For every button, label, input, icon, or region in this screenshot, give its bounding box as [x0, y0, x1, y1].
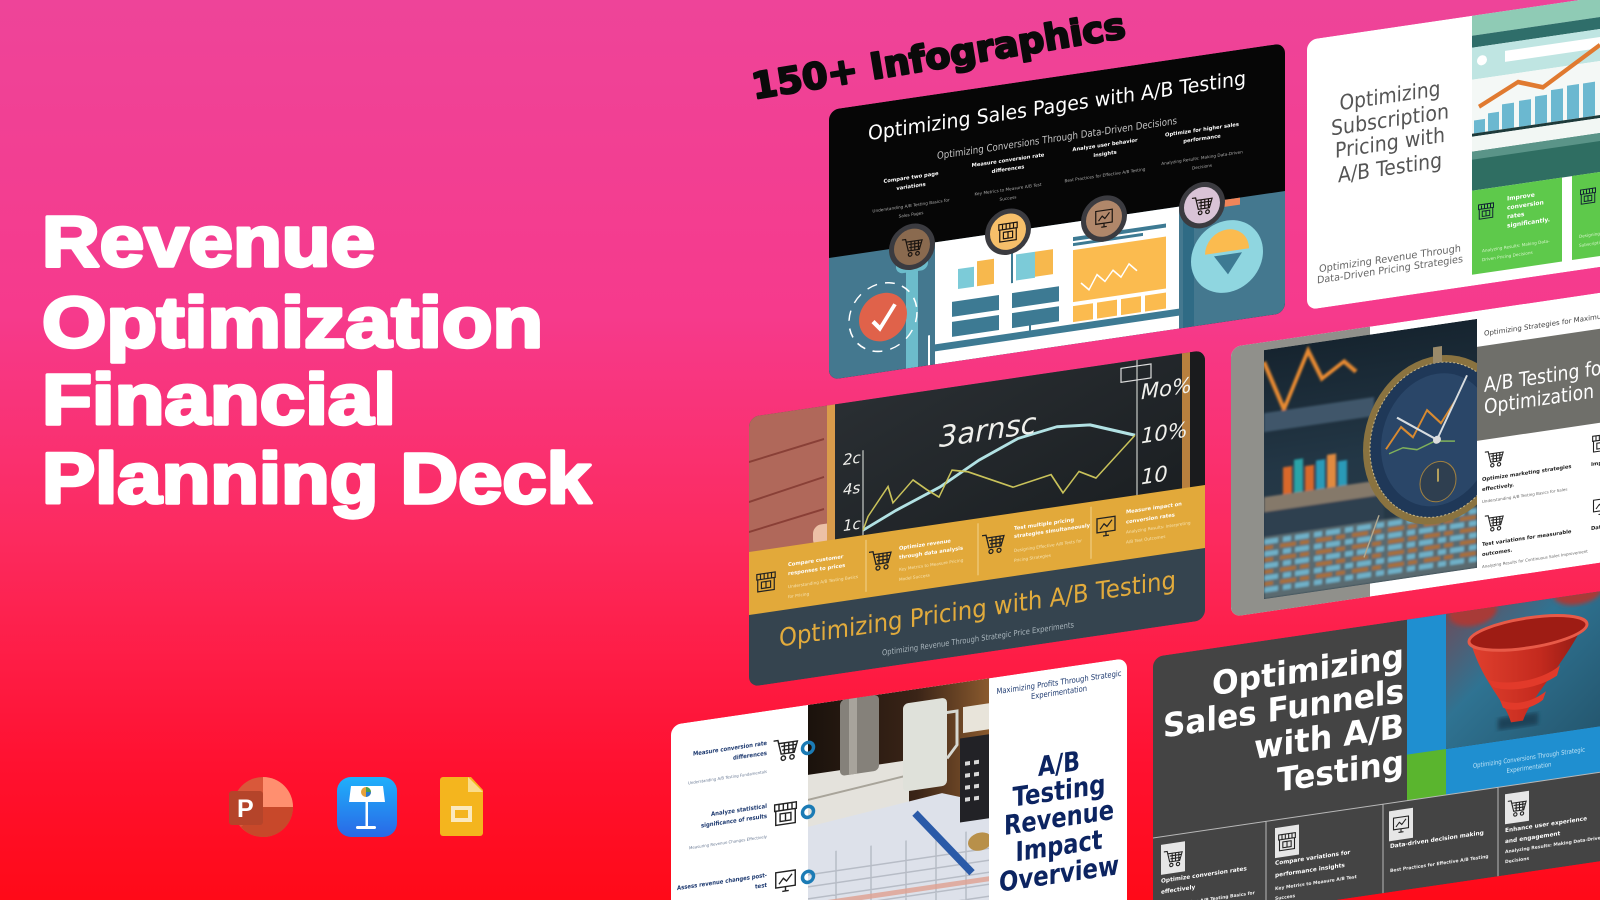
- panel: yellow feature band: Key Metrics to Measure Pricing: [899, 557, 964, 572]
- panel: yellow feature band: Measure impact on: [1126, 501, 1182, 516]
- subtitle: funnels: Experimentation: [1507, 760, 1552, 775]
- text: four column descriptions: Analyzing Results: Making Data-Driven: [1161, 149, 1243, 166]
- text: funnel features: performance insights: [1275, 863, 1345, 879]
- panel: green callout one: significantly.: [1507, 216, 1550, 230]
- software icons row: [229, 777, 483, 837]
- text: feature list: [1482, 431, 1600, 569]
- text: right panel subtitle: Maximizing Profits Through Strategic: [996, 669, 1121, 696]
- icon: Google Slides: [440, 777, 483, 836]
- text: four column labels: Measure conversion rate: [972, 152, 1045, 169]
- heading: subscription title: [1332, 83, 1448, 182]
- image: chalkboard photo: 10%: [1141, 417, 1188, 448]
- image: chalkboard photo: 10: [1141, 461, 1168, 489]
- image: chalkboard photo: 1c: [843, 515, 861, 535]
- heading: subscription title: Pricing with: [1335, 122, 1445, 163]
- text: funnel features: and engagement: [1505, 831, 1560, 845]
- text: four column descriptions: Sales Pages: [899, 210, 923, 219]
- text: metrics list: Measuring Revenue Changes Effectively: [689, 834, 768, 850]
- image: chalkboard photo: Mo%: [1141, 372, 1192, 404]
- heading: Optimizing Sales Funnels with A/B Testing: Sales Funnels: [1163, 671, 1404, 745]
- text: feature list: outcomes.: [1482, 548, 1512, 558]
- panel: yellow feature band: strategies simultaneously: [1014, 523, 1091, 540]
- title: Revenue: [42, 203, 375, 282]
- subtitle: pricing: Optimizing Revenue Through Strategic Price Experiments: [882, 620, 1074, 657]
- heading: subscription title: Optimizing: [1339, 75, 1441, 115]
- icon: circle cart lavender: [1179, 182, 1225, 228]
- text: four column labels: differences: [992, 164, 1024, 175]
- text: funnel features: Decisions: [1505, 856, 1529, 865]
- text: funnel features: Optimize conversion rates: [1161, 866, 1247, 885]
- text: four column labels: [883, 122, 1239, 194]
- panel: yellow feature band: Compare customer: [788, 554, 844, 568]
- text: metrics list: Measure conversion rate: [693, 740, 767, 758]
- panel: green callout two: [1572, 172, 1600, 260]
- text: metrics list: test: [755, 882, 767, 891]
- panel: yellow feature band: Understanding A/B Testing Basics: [788, 574, 858, 589]
- icon: Keynote: [337, 777, 397, 837]
- panel: yellow feature band: [749, 485, 1206, 615]
- icon: PowerPoint: P: [237, 795, 254, 823]
- image: chalkboard photo: [749, 340, 1206, 557]
- subtitle: subscription: Optimizing Revenue Through: [1319, 243, 1461, 275]
- text: feature list: Understanding A/B Testing Basics for Sales: [1482, 487, 1567, 504]
- panel: green callout two: Designing: [1579, 231, 1600, 239]
- panel: card sales pages: [829, 43, 1285, 380]
- image: clock photo: [1264, 319, 1477, 599]
- icon: circle shop: [985, 208, 1031, 255]
- image: funnel photo: [1446, 576, 1600, 749]
- icon row: funnel features: [1161, 791, 1529, 875]
- heading: 150+ Infographics: 150+ Infographics: [749, 6, 1128, 108]
- panel: card sales funnels: [1153, 576, 1600, 900]
- text: feature list: effectively.: [1482, 482, 1514, 493]
- icon: PowerPoint: [229, 777, 293, 837]
- panel: card revenue impact: [671, 658, 1127, 900]
- heading: pricing title: Optimizing Pricing with A/B Testing: [779, 565, 1176, 653]
- heading: sales pages title: Optimizing Sales Pages with A/B Testing: [868, 66, 1246, 145]
- text: metrics list: differences: [733, 750, 767, 762]
- heading: clock title: [1484, 360, 1600, 416]
- panel: green callout one: rates: [1507, 211, 1525, 221]
- subtitle: funnels: [1473, 747, 1585, 774]
- subtitle: subscription: Data-Driven Pricing Strategies: [1317, 254, 1463, 287]
- icon: circle cart: [889, 224, 935, 270]
- panel: yellow feature band: A/B Test Outcomes: [1126, 534, 1165, 545]
- text: feature list: Test variations for measurable: [1482, 529, 1572, 548]
- panel: yellow feature band: through data analysis: [899, 546, 963, 561]
- panel: green callout one: Driven Pricing Decisions: [1482, 250, 1533, 262]
- panel: yellow feature band: Test multiple pricing: [1014, 517, 1074, 532]
- text: funnel features: effectively: [1161, 885, 1195, 896]
- text: four column descriptions: Understanding A/B Testing Basics for: [872, 197, 950, 214]
- heading: A/B Testing Revenue Impact Overview: Revenue: [1004, 795, 1114, 842]
- icon: circle dashboard: [1081, 195, 1127, 242]
- panel: green callout one: Improve: [1507, 192, 1535, 203]
- title: Planning Deck: [42, 440, 592, 519]
- subtitle: sales pages: Optimizing Conversions Through Data-Driven Decisions: [937, 116, 1177, 162]
- panel: yellow feature band: for Pricing: [788, 591, 810, 599]
- text: funnel features: Data-driven decision making: [1390, 830, 1484, 850]
- title: [42, 203, 592, 519]
- panel: yellow feature band: responses to prices: [788, 563, 845, 577]
- text: metrics list: [677, 733, 814, 900]
- text: four column descriptions: Best Practices for Effective A/B Testing: [1065, 166, 1146, 183]
- text: four column labels: Optimize for higher sales: [1165, 122, 1239, 139]
- text: four column descriptions: Success: [1000, 194, 1016, 202]
- text: funnel features: Compare variations for: [1275, 850, 1350, 867]
- heading: Optimizing Sales Funnels with A/B Testing: Optimizing: [1212, 636, 1404, 703]
- text: four column labels: insights: [1093, 150, 1117, 159]
- panel: card pricing: [749, 340, 1206, 687]
- panel: yellow feature band: Pricing Strategies: [1014, 553, 1051, 563]
- text: right panel subtitle: Experimentation: [1031, 684, 1087, 701]
- text: metrics list: Assess revenue changes post-: [677, 872, 767, 892]
- title: Optimization: [42, 284, 543, 363]
- text: four column descriptions: Decisions: [1192, 163, 1212, 171]
- panel: card clock: [1231, 280, 1600, 617]
- heading: A/B Testing Revenue Impact Overview: Testing: [1012, 769, 1105, 814]
- panel: yellow feature band: conversion rates: [1126, 512, 1175, 526]
- text: four column labels: variations: [896, 182, 926, 192]
- title: Financial: [42, 361, 396, 440]
- text: four column labels: Compare two page: [883, 171, 939, 185]
- text: funnel features: Key Metrics to Measure A/B Test: [1275, 874, 1358, 892]
- panel: grey title band: [1477, 316, 1600, 441]
- heading: A/B Testing Revenue Impact Overview: A/B: [1038, 746, 1080, 783]
- panel: green callout one: [1472, 178, 1562, 275]
- text: funnel features: [1161, 813, 1600, 900]
- panel: card subscription pricing: [1307, 0, 1600, 310]
- text: feature list: Analyzing Results for Continuous Sales Improvement: [1482, 549, 1588, 569]
- panel: yellow feature band: Model Success: [899, 572, 930, 582]
- panel: yellow feature band: Analyzing Results: Interpreting: [1126, 520, 1191, 535]
- text: metrics list: significance of results: [701, 813, 767, 830]
- image: chalkboard photo: 4s: [843, 479, 860, 499]
- panel: green callout one: conversion: [1507, 199, 1544, 212]
- heading: A/B Testing Revenue Impact Overview: Impact: [1016, 825, 1103, 868]
- text: four column labels: Analyze user behavior: [1072, 138, 1138, 153]
- heading: subscription title: A/B Testing: [1338, 147, 1442, 187]
- heading: Optimizing Sales Funnels with A/B Testing: Testing: [1277, 742, 1404, 800]
- image: chalkboard photo: 3arnsc: [939, 406, 1037, 454]
- text: four column descriptions: [872, 149, 1243, 223]
- heading: Optimizing Sales Funnels with A/B Testing: with A/B: [1254, 706, 1404, 767]
- heading: subscription title: Subscription: [1331, 98, 1449, 140]
- image: chalkboard photo: 2c: [843, 449, 861, 469]
- text: four column descriptions: Key Metrics to Measure A/B Test: [975, 182, 1042, 197]
- panel: green callout one: Analyzing Results: Making Data-: [1482, 238, 1550, 253]
- text: four column labels: performance: [1183, 133, 1221, 145]
- panel: yellow feature band: Designing Effective A/B Tests for: [1014, 538, 1082, 553]
- panel: yellow feature band: Optimize revenue: [899, 538, 951, 552]
- text: funnel features: Best Practices for Effective A/B Testing: [1390, 854, 1489, 874]
- text: metrics list: Understanding A/B Testing Fundamentals: [688, 769, 767, 785]
- heading: A/B Testing Revenue Impact Overview: [1000, 751, 1118, 891]
- image: desk photo: [808, 678, 992, 900]
- text: feature list: Optimize marketing strategies: [1482, 464, 1571, 483]
- text: metrics list: Analyze statistical: [711, 803, 767, 818]
- text: funnel features: Enhance user experience: [1505, 816, 1587, 834]
- heading: A/B Testing Revenue Impact Overview: Overview: [999, 850, 1119, 899]
- heading: Optimizing Sales Funnels with A/B Testing: [1165, 649, 1403, 791]
- text: right panel subtitle: [997, 670, 1122, 700]
